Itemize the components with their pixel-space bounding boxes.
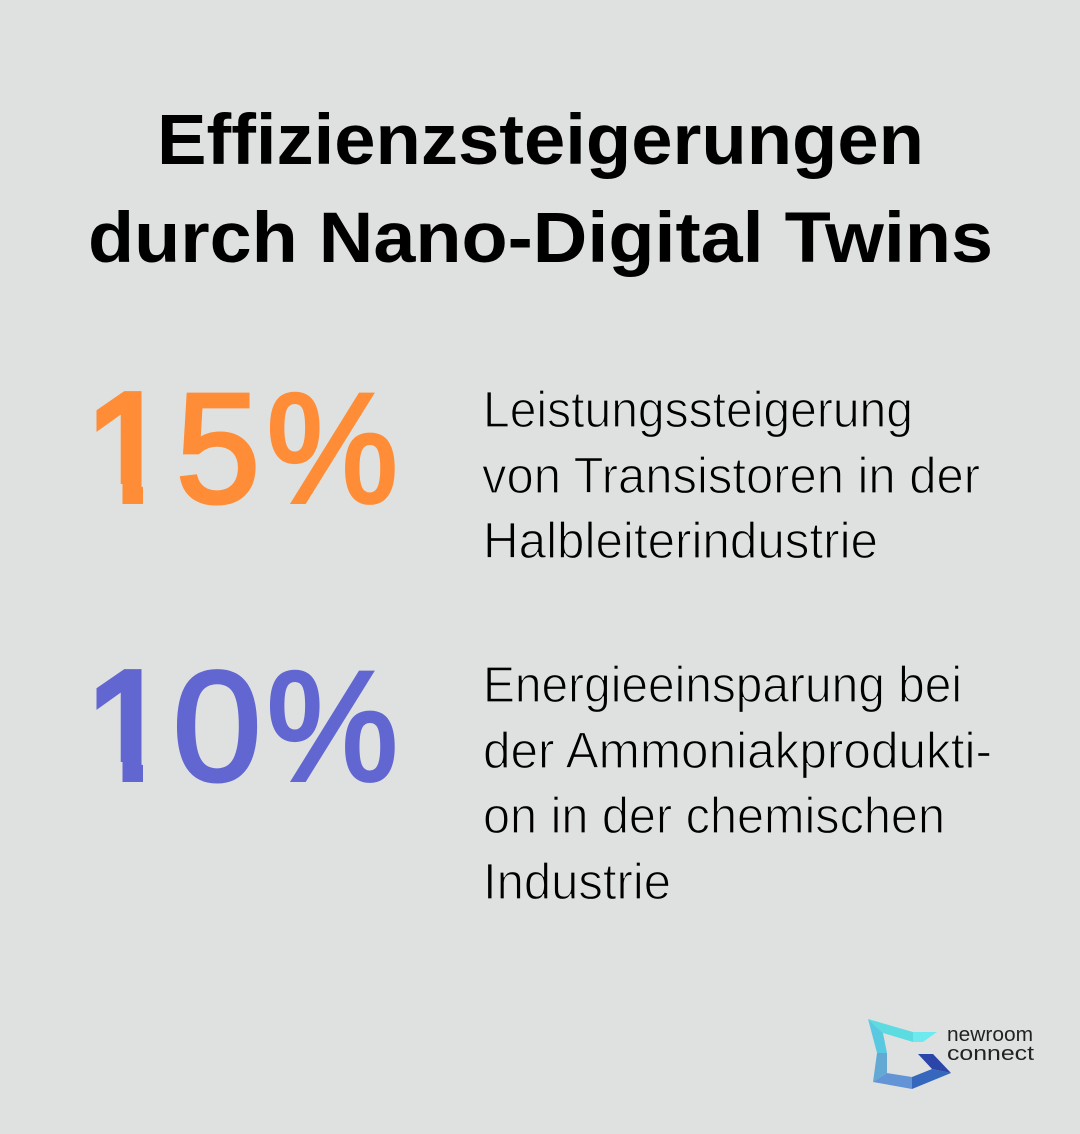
stat description: Energieeinsparung: on in der chemischen <box>483 787 945 844</box>
logo wordmark: newroom <box>947 1024 1033 1046</box>
stat number: 15%: 5 <box>176 362 260 536</box>
stat number: 15%: % <box>267 362 398 536</box>
stat number: 10% <box>96 669 395 784</box>
stat number: 15%: 1 <box>85 362 172 536</box>
stat number: 15% <box>96 391 395 506</box>
logo wordmark: connect <box>947 1043 1035 1065</box>
icon: logo mark <box>868 1019 951 1089</box>
stat number: 10%: 0 <box>173 640 261 814</box>
logo: newroom connect <box>868 1019 1035 1089</box>
stat description: Leistungssteigerung: von Transistoren in der <box>482 447 980 504</box>
title: Effizienzsteigerungen <box>157 101 924 180</box>
stat description: Leistungssteigerung: Halbleiterindustrie <box>483 512 878 569</box>
stat number: 10%: % <box>267 640 398 814</box>
stat: 10% <box>96 666 990 899</box>
stat description: Energieeinsparung: Industrie <box>483 853 671 910</box>
title <box>88 101 993 278</box>
title: durch Nano-Digital Twins <box>88 199 993 278</box>
stat description: Energieeinsparung <box>483 656 992 910</box>
stat: 15% <box>96 390 979 558</box>
stat description: Energieeinsparung: der Ammoniakprodukti- <box>483 722 992 779</box>
stat number: 10%: 1 <box>85 640 172 814</box>
stat description: Leistungssteigerung <box>482 381 980 569</box>
stat description: Leistungssteigerung: Leistungssteigerung <box>483 381 913 438</box>
logo wordmark <box>947 1024 1035 1065</box>
stat description: Energieeinsparung: Energieeinsparung bei <box>483 656 962 713</box>
